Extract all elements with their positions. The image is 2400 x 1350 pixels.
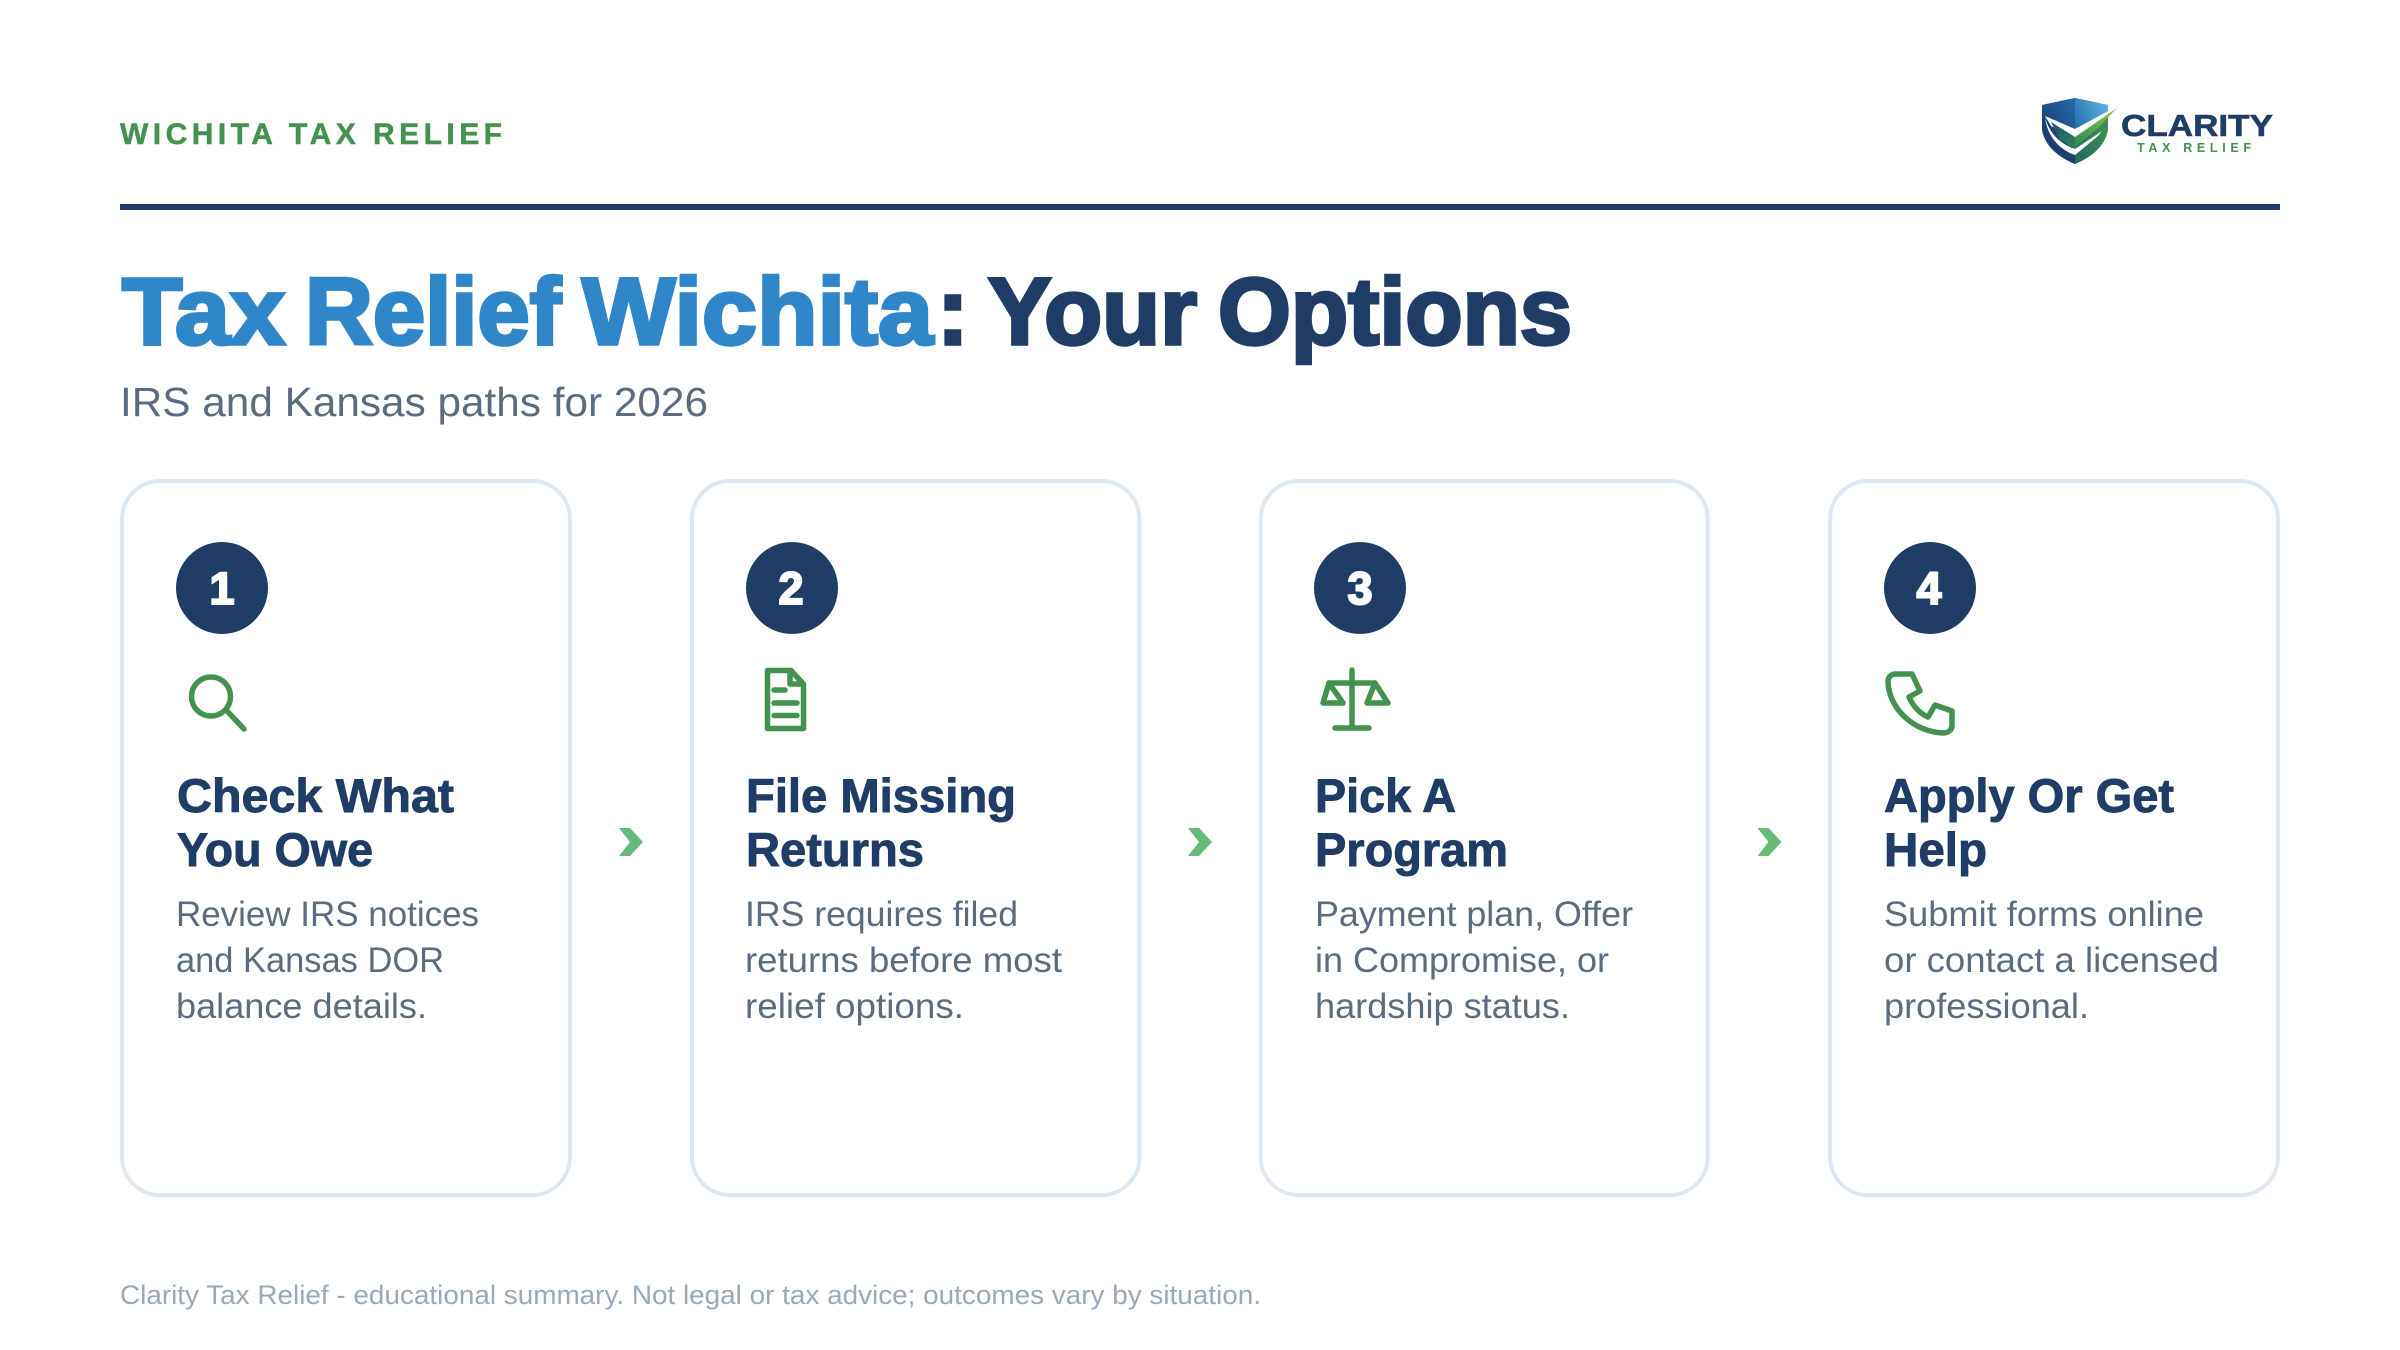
- step number 3: 3: [1347, 563, 1373, 614]
- description: Review IRS notices: [176, 895, 479, 934]
- title: Relief: [305, 259, 561, 365]
- description: returns before most: [745, 941, 1062, 980]
- heading: Pick A Program: Pick A: [1315, 769, 1456, 822]
- footer disclaimer: Clarity Tax Relief - educational summary. Not legal or tax advice; outcomes vary by situation.: [120, 1280, 1261, 1310]
- logo shield: [2042, 98, 2117, 164]
- logo tagline: TAX RELIEF: [2137, 141, 2251, 155]
- panel: step 2: [692, 481, 1140, 1195]
- description: [745, 895, 1062, 1026]
- heading: Apply Or Get Help: [1884, 769, 2174, 876]
- step number 1: [176, 542, 268, 634]
- heading: Pick A Program: Program: [1315, 823, 1508, 876]
- step number 1: 1: [209, 563, 235, 614]
- heading: File Missing Returns: Returns: [746, 823, 924, 876]
- heading: Check What You Owe: Check What: [177, 769, 454, 822]
- description: hardship status.: [1315, 987, 1570, 1026]
- step number 2: 2: [778, 563, 804, 614]
- description: balance details.: [176, 987, 427, 1026]
- description: in Compromise, or: [1315, 941, 1609, 980]
- eyebrow: WICHITA TAX RELIEF: WICHITA TAX RELIEF: [120, 118, 502, 151]
- arrow 2 to 3: [1188, 828, 1212, 856]
- icon: magnifying glass: [192, 677, 244, 729]
- panel: step 3: [1261, 481, 1708, 1195]
- heading: Apply Or Get Help: Apply Or Get: [1884, 769, 2174, 822]
- step number 3: [1314, 542, 1406, 634]
- description: [176, 895, 479, 1026]
- title: Wichita: [582, 259, 934, 365]
- title: [122, 259, 1572, 365]
- step number 4: [1884, 542, 1976, 634]
- arrow 1 to 2: [619, 828, 643, 856]
- description: and Kansas DOR: [176, 941, 444, 980]
- title: Options: [1218, 259, 1572, 365]
- icon: balance scale: [1323, 670, 1388, 728]
- step number 2: [746, 542, 838, 634]
- description: relief options.: [745, 987, 964, 1026]
- title: :: [937, 259, 969, 365]
- description: Payment plan, Offer: [1315, 895, 1633, 934]
- subtitle: IRS and Kansas paths for 2026: [120, 379, 708, 425]
- title: Tax: [122, 259, 285, 365]
- arrow 3 to 4: [1758, 828, 1782, 856]
- description: [1315, 895, 1633, 1026]
- description: professional.: [1884, 987, 2089, 1026]
- heading: File Missing Returns: File Missing: [746, 769, 1016, 822]
- heading: Check What You Owe: You Owe: [177, 823, 373, 876]
- logo wordmark: CLARITY: [2121, 108, 2273, 143]
- icon: telephone: [1888, 674, 1952, 733]
- heading: Check What You Owe: [177, 769, 454, 876]
- description: [1884, 895, 2219, 1026]
- heading: File Missing Returns: [746, 769, 1016, 876]
- panel: step 1: [122, 481, 570, 1195]
- icon: document: [768, 670, 804, 728]
- heading: Apply Or Get Help: Help: [1884, 823, 1987, 876]
- panel: step 4: [1830, 481, 2278, 1195]
- title: Your: [988, 259, 1197, 365]
- heading: Pick A Program: [1315, 769, 1508, 876]
- description: or contact a licensed: [1884, 941, 2219, 980]
- description: IRS requires filed: [745, 895, 1018, 934]
- logo: Clarity Tax Relief: [2042, 98, 2273, 164]
- description: Submit forms online: [1884, 895, 2204, 934]
- step number 4: 4: [1916, 563, 1942, 614]
